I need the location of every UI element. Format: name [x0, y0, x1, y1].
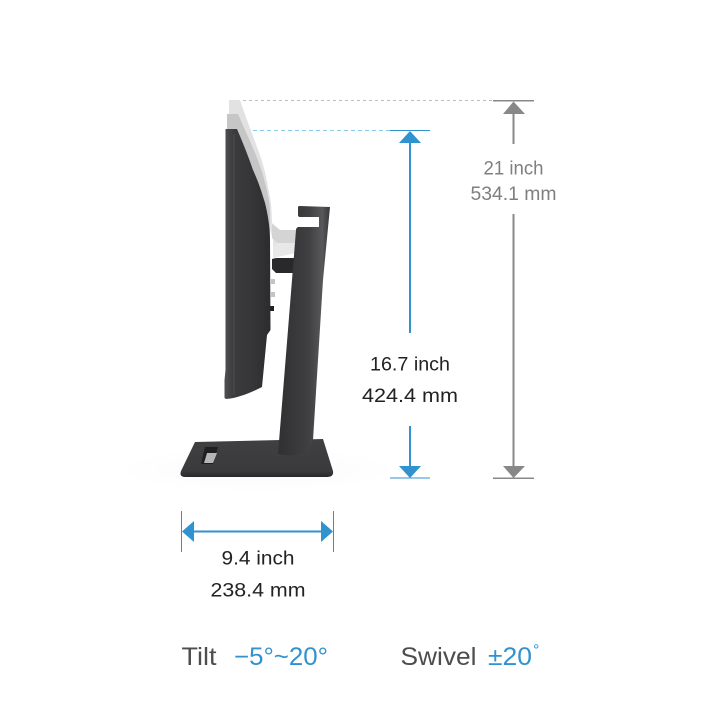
label: swivel: Swivel	[400, 643, 476, 671]
monitor side panel	[224, 129, 270, 399]
label: adjustable height: 424.4 mm	[362, 385, 458, 407]
dotted guide: total height	[243, 100, 494, 102]
label: swivel: ±20	[488, 643, 532, 671]
label: depth: 9.4 inch	[222, 548, 294, 570]
monitor hinge	[272, 258, 296, 273]
label: adjustable height: 16.7 inch	[370, 354, 450, 376]
stand base	[180, 439, 333, 477]
stand neck	[278, 206, 330, 455]
dotted guide: adjustable height	[253, 130, 390, 132]
label: swivel: °	[533, 642, 539, 659]
label: total height	[470, 158, 556, 205]
monitor raised ghost	[227, 100, 296, 258]
floor shadow	[118, 448, 398, 492]
label: depth	[210, 548, 306, 602]
gray height arrow	[493, 100, 534, 479]
label: depth: 238.4 mm	[210, 580, 306, 602]
label: tilt	[182, 643, 328, 671]
label: tilt: Tilt	[182, 643, 217, 671]
label: adjustable height	[362, 354, 458, 407]
label: tilt: −5°~20°	[234, 643, 328, 671]
blue depth arrow	[181, 511, 334, 552]
label: total height: 21 inch	[484, 158, 544, 180]
monitor rear ports	[270, 279, 275, 311]
label: swivel	[400, 642, 539, 671]
label: total height: 534.1 mm	[470, 184, 556, 205]
blue height arrow	[390, 130, 430, 478]
